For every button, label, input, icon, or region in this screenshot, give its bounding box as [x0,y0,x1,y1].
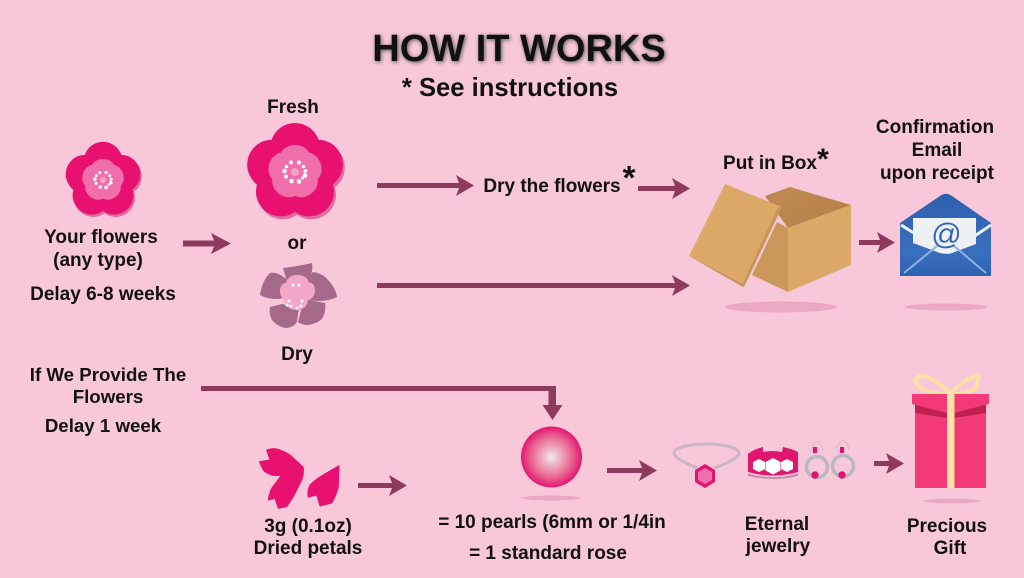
arrow: provided flowers to pearl [201,386,562,420]
text: your flowers: (any type) [53,250,143,271]
icon: earrings [806,441,854,479]
text: precious gift [907,516,987,559]
label: put in box [723,143,829,176]
icon: box [689,184,851,312]
text: precious gift: Gift [934,538,967,559]
icon: email envelope: @ [931,218,961,251]
title: HOW IT WORKS [372,28,666,70]
text: eternal jewelry: Eternal [745,514,809,535]
label: fresh: Fresh [267,97,319,118]
text: your flowers: Your flowers [44,227,158,248]
arrow: petals to pearls [358,475,407,496]
text: confirmation email: Email [912,140,962,161]
text: dried petals: 3g (0.1oz) [264,516,352,537]
text: precious gift: Precious [907,516,987,537]
text: confirmation email: upon receipt [880,163,995,184]
icon: gift box [912,376,989,504]
text: your flowers [30,227,176,305]
icon: necklace [674,444,739,488]
arrow: dry flower to box [377,275,690,296]
text: if we provide the flowers: If We Provide The [30,364,186,385]
text: if we provide the flowers: Delay 1 week [45,415,162,436]
text: eternal jewelry [745,514,811,557]
label: or: or [288,233,307,254]
text: dry the flowers: Dry the flowers [483,176,621,197]
text: dried petals [254,516,362,559]
text: if we provide the flowers [30,364,186,436]
label: dry: Dry [281,344,313,365]
icon: pearl [521,426,582,500]
icon: email envelope [900,194,991,310]
arrow: flowers to state [183,233,231,254]
text: pearl equivalents: = 1 standard rose [469,543,627,564]
label: put in box: Put in Box [723,153,817,174]
subtitle: * See instructions [402,74,618,102]
text: confirmation email: Confirmation [876,117,994,138]
arrow: pearls to jewelry [607,460,657,481]
icon: fresh flower [241,123,351,229]
arrow: box to email [859,232,895,253]
arrow: jewelry to gift [874,453,904,474]
text: pearl equivalents [438,512,666,564]
text: if we provide the flowers: Flowers [73,386,143,407]
arrow: drying to box [638,178,690,199]
icon: dried petals [259,449,339,508]
text: your flowers: Delay 6-8 weeks [30,284,176,305]
arrow: fresh to drying [377,175,474,196]
icon: your flowers [61,142,147,224]
label: put in box: * [817,143,829,176]
text: dry the flowers [483,159,636,197]
text: dried petals: Dried petals [254,538,362,559]
text: pearl equivalents: = 10 pearls (6mm or 1/4in [438,512,666,533]
icon: bracelet [748,447,798,479]
text: eternal jewelry: jewelry [745,536,811,557]
icon: dry flower [260,263,337,328]
text: dry the flowers: * [623,159,636,196]
text: confirmation email [876,117,995,184]
